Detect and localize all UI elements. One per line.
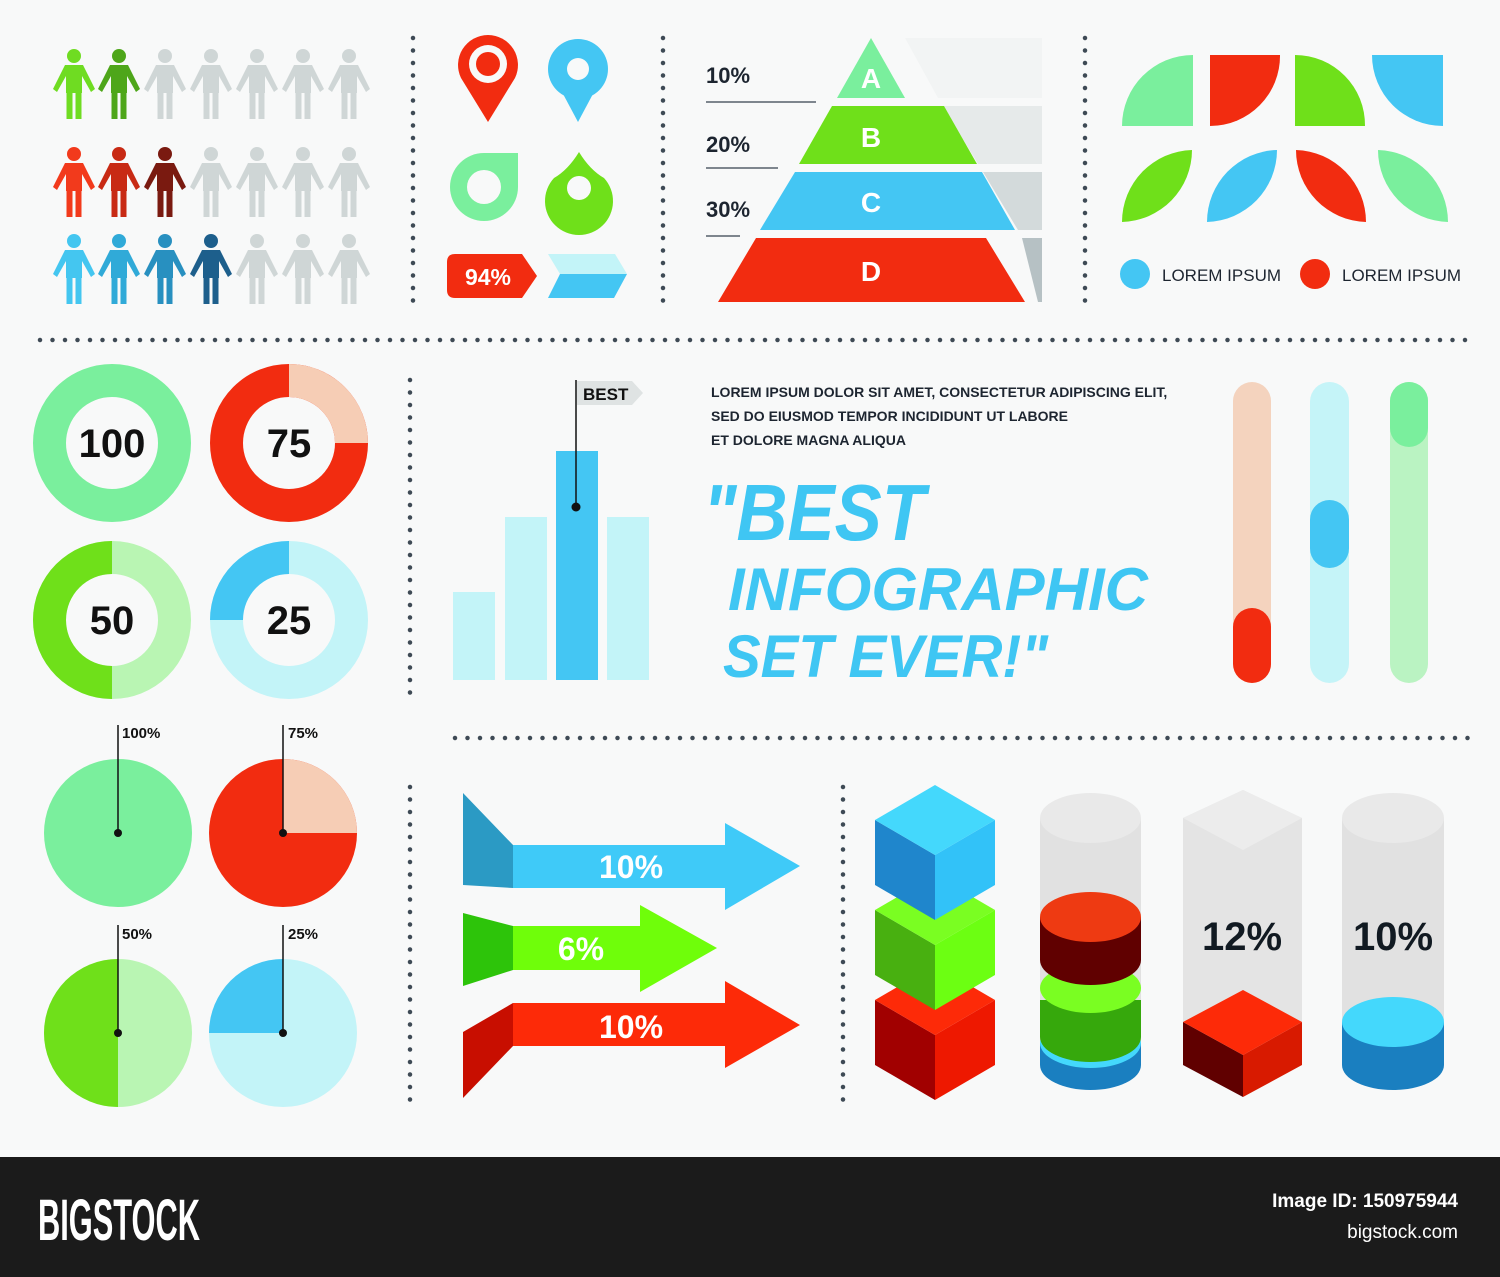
arrow: blue 10% [463, 793, 800, 910]
legend: LOREM IPSUM [1342, 266, 1461, 285]
pie charts: 75% [288, 725, 318, 742]
footer bar: bigstock.com [1347, 1222, 1458, 1243]
footer bar: Image ID: 150975944 [1272, 1191, 1458, 1212]
vertical sliders [1233, 382, 1428, 683]
people row: red [53, 147, 370, 217]
people row: blue [53, 234, 370, 304]
pie charts: 25% [288, 926, 318, 943]
prism 12%: 12% [1202, 915, 1282, 959]
tag: 94% [447, 254, 537, 298]
icon: green drop [545, 152, 613, 235]
legend [1120, 259, 1461, 289]
cylinder 10%: 10% [1353, 915, 1433, 959]
icon: mint drop [450, 153, 518, 221]
pyramid chart: D [861, 256, 881, 287]
pyramid chart: A [861, 63, 881, 94]
people row: green [53, 49, 370, 119]
pie charts: 100% [122, 725, 160, 742]
flag: BEST [577, 381, 643, 405]
headline: "BEST [703, 468, 930, 557]
headline: INFOGRAPHIC [728, 556, 1150, 623]
petals panel [1120, 55, 1461, 289]
markers panel [447, 35, 627, 298]
arrow: green 6%: 6% [558, 931, 604, 967]
cylinder 10% [1342, 793, 1444, 1090]
pyramid chart: B [861, 122, 881, 153]
icon: blue map pin [548, 39, 608, 122]
arrows [463, 793, 800, 1098]
stacked cubes [875, 785, 995, 1100]
arrow: green 6% [463, 905, 717, 992]
donut charts: 100 [79, 422, 145, 466]
paragraph text: ET DOLORE MAGNA ALIQUA [711, 432, 906, 448]
donut charts: 25 [267, 599, 311, 643]
paragraph text [711, 384, 1167, 448]
stacked cylinder [1040, 793, 1141, 1090]
bar chart [453, 380, 649, 680]
paragraph text: SED DO EIUSMOD TEMPOR INCIDIDUNT UT LABORE [711, 408, 1068, 424]
people pictogram panel [53, 49, 370, 304]
pyramid chart: 20% [706, 132, 750, 157]
donut charts: 50 [90, 599, 134, 643]
footer bar [0, 1157, 1500, 1277]
flag: BEST: BEST [583, 385, 629, 404]
paragraph text: LOREM IPSUM DOLOR SIT AMET, CONSECTETUR ADIPISCING ELIT, [711, 384, 1167, 400]
donut charts [33, 364, 368, 699]
pyramid chart [706, 38, 1042, 302]
footer bar: BIGSTOCK [38, 1188, 200, 1253]
legend: LOREM IPSUM [1162, 266, 1281, 285]
headline: SET EVER!" [723, 623, 1049, 690]
pyramid chart: 30% [706, 197, 750, 222]
icon: red map pin [458, 35, 518, 122]
pyramid chart: C [861, 187, 881, 218]
pyramid chart: 10% [706, 63, 750, 88]
icon: chevron [548, 254, 627, 298]
donut charts: 75 [267, 422, 311, 466]
headline [703, 468, 1150, 690]
tag: 94%: 94% [465, 264, 511, 290]
arrow: red 10% [463, 981, 800, 1098]
arrow: blue 10%: 10% [599, 849, 663, 885]
pie charts [44, 725, 357, 1107]
pie charts: 50% [122, 926, 152, 943]
arrow: red 10%: 10% [599, 1009, 663, 1045]
prism 12% [1183, 790, 1302, 1097]
